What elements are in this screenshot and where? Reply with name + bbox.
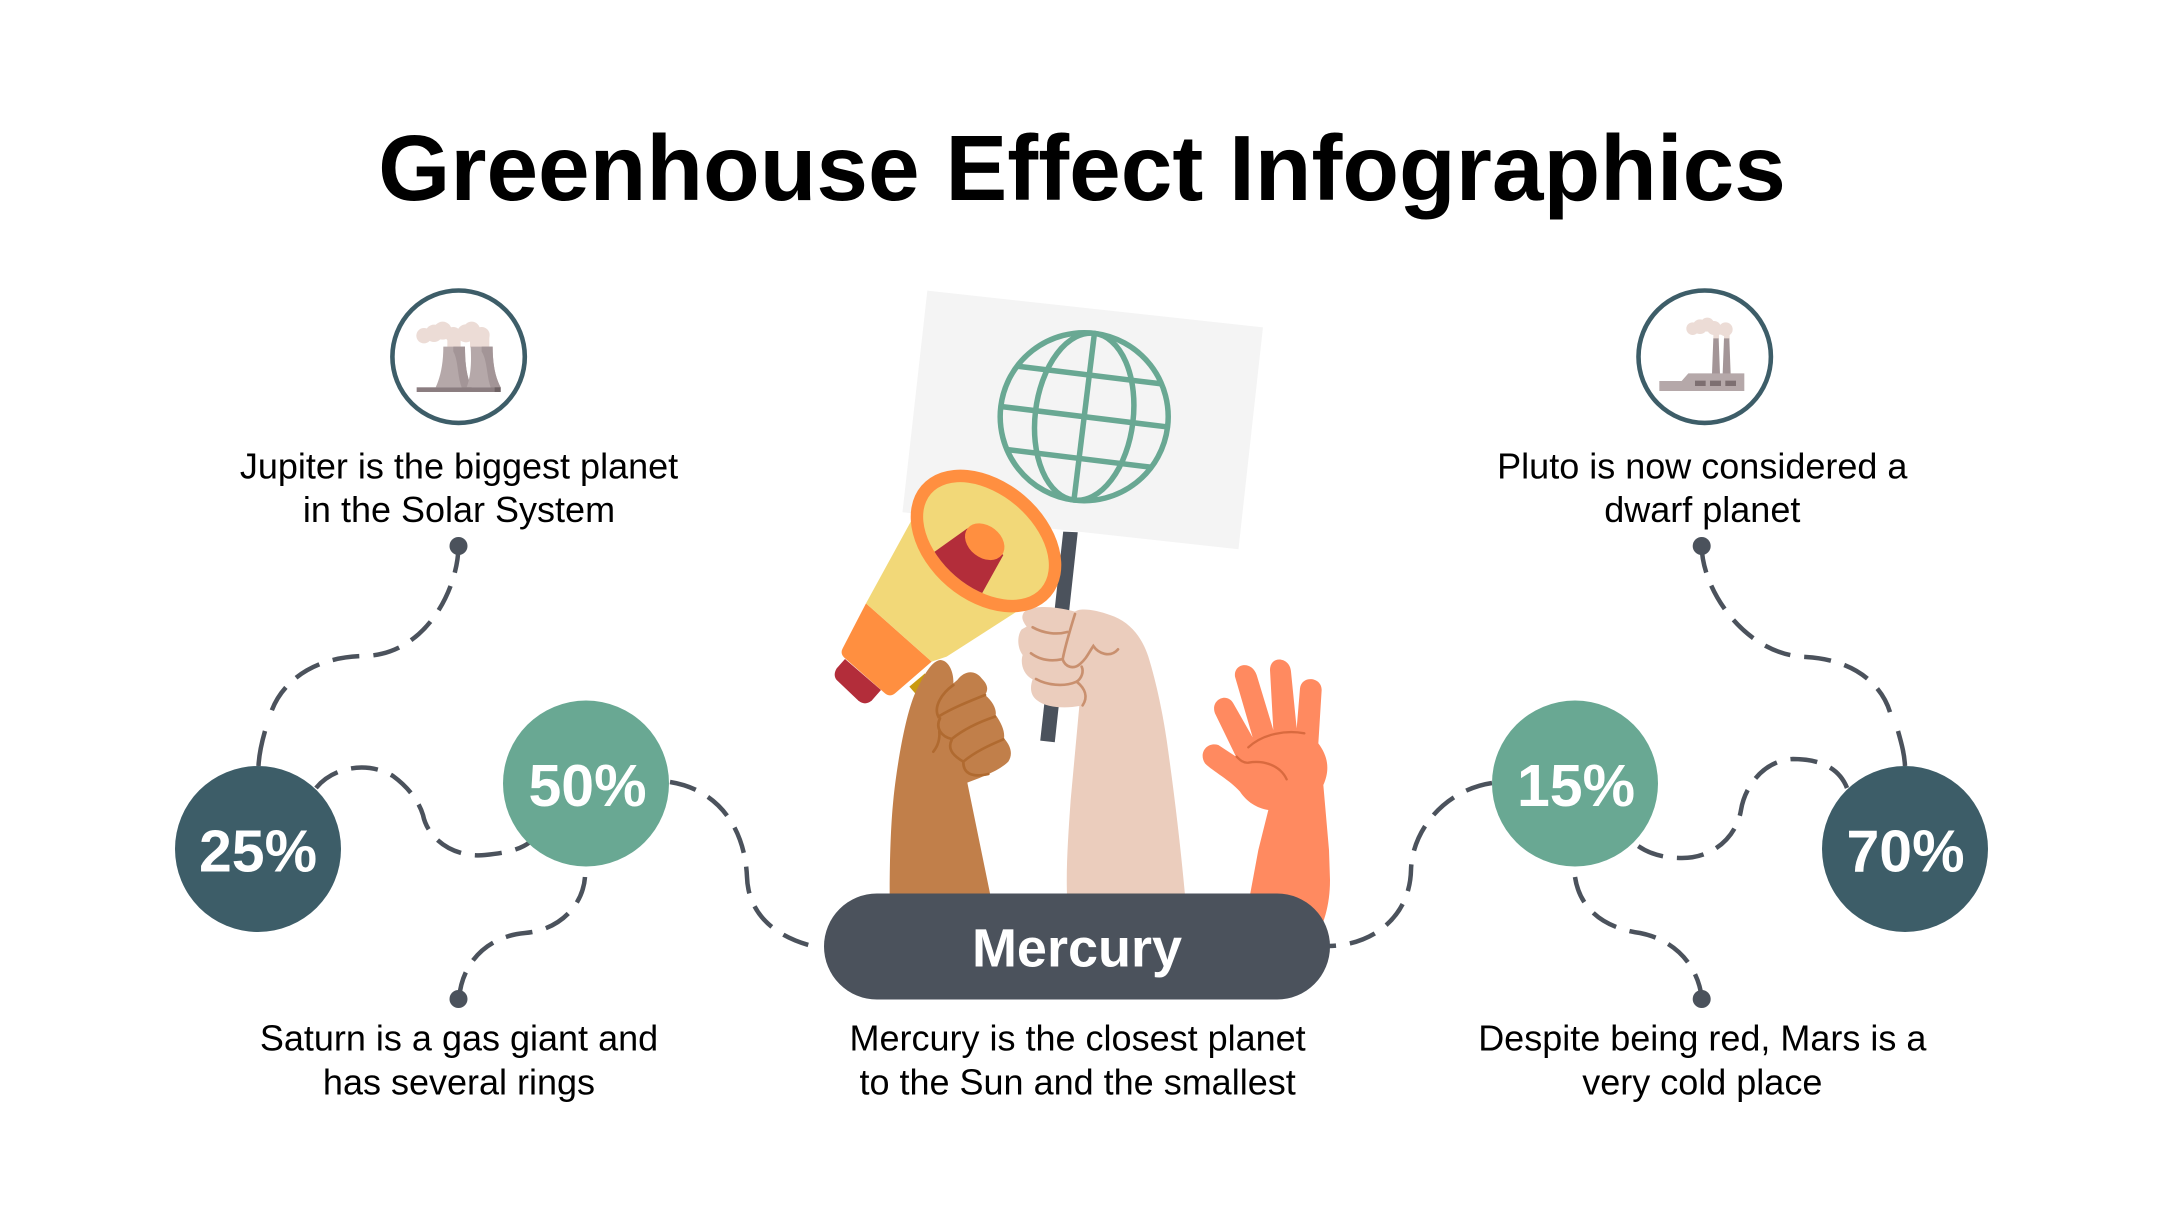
badge: 25% <box>175 766 341 932</box>
icon: factory <box>1638 290 1771 423</box>
dashed connector: 70% to Pluto <box>1693 537 1905 766</box>
light hand holding sign <box>1018 607 1185 895</box>
badge: 50%: 50% <box>528 753 647 819</box>
badge: 15%: 15% <box>1517 753 1635 819</box>
dashed connector: 25% to Jupiter <box>258 537 468 766</box>
badge: 70% <box>1822 766 1988 932</box>
dashed connector: 15% to Mars <box>1575 877 1711 1008</box>
brown hand gripping megaphone <box>890 660 1011 895</box>
text: Mars: very cold place <box>1582 1062 1822 1103</box>
text: Mercury description: Mercury is the closest planet <box>850 1017 1306 1058</box>
icon: cooling towers <box>392 290 525 423</box>
badge: 70%: 70% <box>1846 818 1965 884</box>
icon: globe <box>991 323 1178 510</box>
protest sign <box>902 291 1263 549</box>
badge: 50% <box>503 700 669 866</box>
text: Saturn: has several rings <box>323 1062 595 1103</box>
title: Greenhouse Effect Infographics <box>378 116 1786 220</box>
megaphone <box>834 470 1062 704</box>
Mercury pill label: Mercury <box>972 918 1182 978</box>
dashed connector: 15% to Mercury <box>1329 783 1492 946</box>
dashed connector: 25% to 50% <box>316 768 530 855</box>
text: Pluto: Pluto is now considered a <box>1497 445 1908 486</box>
orange open hand <box>1203 660 1330 937</box>
badge: 15% <box>1492 700 1658 866</box>
text: Saturn: Saturn is a gas giant and <box>260 1017 658 1058</box>
text: Jupiter: Jupiter is the biggest planet <box>240 445 678 486</box>
illustration: protest hands with sign and megaphone <box>835 291 1330 937</box>
dashed connector: 50% to Saturn <box>450 877 585 1008</box>
text: Mars: Despite being red, Mars is a <box>1478 1017 1927 1058</box>
text: Pluto: dwarf planet <box>1604 489 1800 530</box>
Mercury pill label <box>824 894 1330 1000</box>
text: Jupiter: in the Solar System <box>303 489 615 530</box>
dashed connector: 70% to 15% <box>1634 759 1847 858</box>
text: Mercury description: to the Sun and the smallest <box>859 1062 1296 1103</box>
sign pole <box>1040 532 1078 742</box>
dashed connector: 50% to Mercury <box>670 782 812 946</box>
badge: 25%: 25% <box>199 818 317 884</box>
